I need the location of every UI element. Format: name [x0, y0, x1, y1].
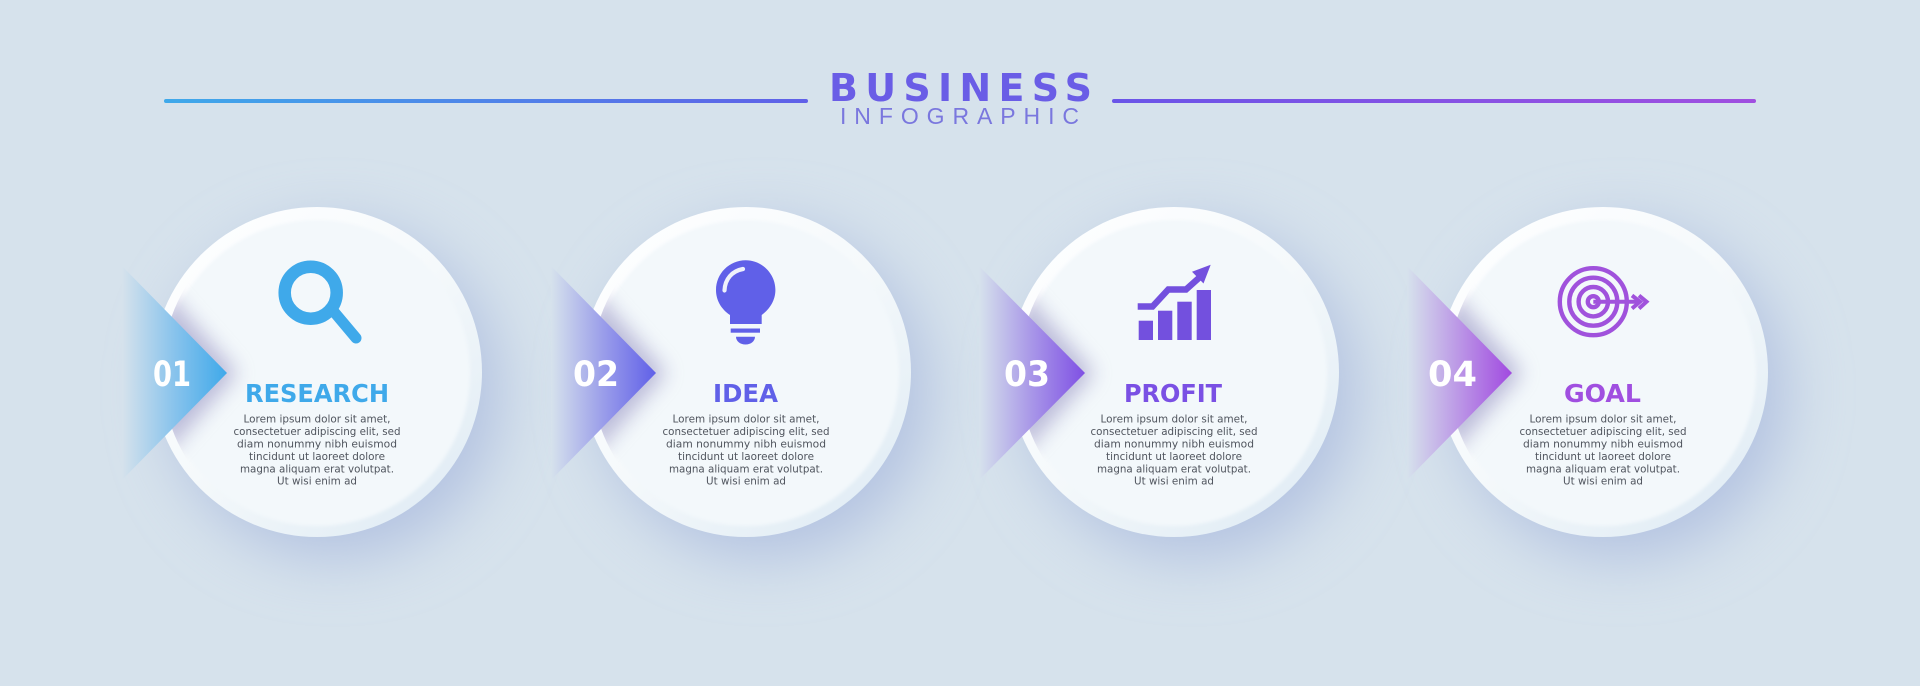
body text [1520, 413, 1686, 488]
body text: Ut wisi enim ad [706, 475, 786, 488]
number: 02 [573, 355, 619, 395]
body text: diam nonummy nibh euismod [237, 438, 397, 450]
header line right [1112, 99, 1756, 103]
heading: RESEARCH [245, 379, 389, 408]
body text: magna aliquam erat volutpat. [1526, 462, 1680, 475]
number: 01 [153, 355, 191, 395]
body text: magna aliquam erat volutpat. [669, 462, 823, 475]
panel: goal [1407, 207, 1786, 557]
heading: IDEA [713, 379, 779, 408]
circle card [1438, 207, 1768, 537]
body text: magna aliquam erat volutpat. [1097, 462, 1251, 475]
heading: PROFIT [1124, 379, 1222, 408]
body text: Lorem ipsum dolor sit amet, [1530, 413, 1676, 426]
icon: magnifier [285, 267, 356, 338]
arrow tab [122, 266, 227, 480]
number: 04 [1428, 355, 1477, 395]
panel: profit [979, 207, 1357, 557]
arrow tab [979, 266, 1085, 480]
body text: consectetuer adipiscing elit, sed [234, 425, 400, 438]
circle card [152, 207, 482, 537]
body text: consectetuer adipiscing elit, sed [1090, 425, 1258, 438]
title: business: BUSINESS [829, 66, 1092, 110]
body text: Lorem ipsum dolor sit amet, [244, 413, 390, 426]
body text [662, 413, 830, 488]
body text: Lorem ipsum dolor sit amet, [672, 413, 820, 426]
body text: tincidunt ut laoreet dolore [678, 450, 814, 463]
circle card [581, 207, 911, 537]
infographic canvas [128, 72, 1806, 576]
body text: consectetuer adipiscing elit, sed [662, 425, 830, 438]
body text: tincidunt ut laoreet dolore [249, 450, 385, 463]
number: 03 [1004, 355, 1050, 395]
header line left [164, 99, 808, 103]
circle card [1009, 207, 1339, 537]
body text: Ut wisi enim ad [1563, 475, 1643, 488]
body text: diam nonummy nibh euismod [1523, 438, 1683, 450]
body text [234, 413, 400, 488]
panel: research [122, 207, 500, 557]
subtitle: infographic: INFOGRAPHIC [840, 103, 1079, 129]
body text: magna aliquam erat volutpat. [240, 462, 394, 475]
panel: idea [551, 207, 929, 557]
body text: tincidunt ut laoreet dolore [1106, 450, 1242, 463]
heading: GOAL [1564, 379, 1641, 408]
body text: Ut wisi enim ad [277, 475, 357, 488]
icon: light bulb [716, 260, 775, 344]
body text: diam nonummy nibh euismod [1094, 438, 1254, 450]
body text: Ut wisi enim ad [1134, 475, 1214, 488]
body text [1090, 413, 1258, 488]
body text: tincidunt ut laoreet dolore [1535, 450, 1671, 463]
icon: target [1560, 268, 1646, 335]
header [164, 66, 1756, 129]
body text: diam nonummy nibh euismod [666, 438, 826, 450]
body text: consectetuer adipiscing elit, sed [1520, 425, 1686, 438]
body text: Lorem ipsum dolor sit amet, [1100, 413, 1248, 426]
icon: growth chart [1138, 265, 1211, 340]
arrow tab [1407, 266, 1512, 480]
arrow tab [551, 266, 656, 480]
